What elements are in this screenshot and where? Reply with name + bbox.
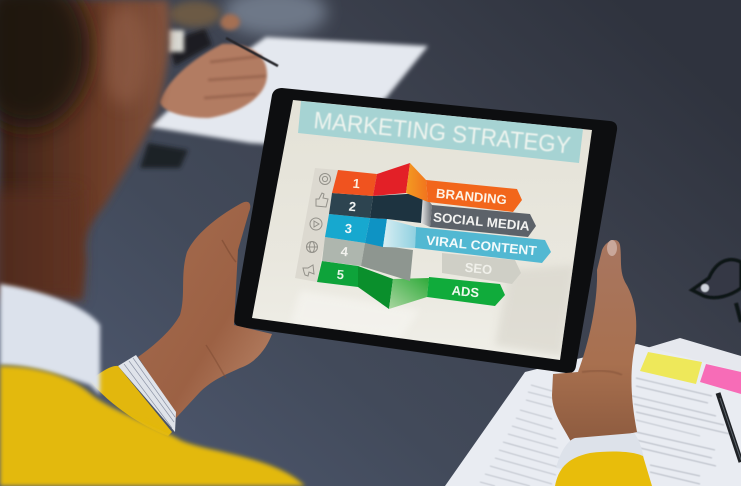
wrist and palm — [138, 202, 272, 418]
chart step 3: viral content: 3 — [344, 221, 353, 236]
hair — [0, 0, 90, 128]
ear glow — [101, 5, 149, 105]
shirt collar, blurred — [0, 284, 100, 395]
colleague's sleeve — [168, 28, 212, 66]
shirt cuff — [118, 355, 176, 432]
sweater sleeve — [90, 366, 172, 436]
tablet body — [234, 88, 617, 373]
icon: play — [310, 218, 322, 230]
knuckle shadow — [582, 371, 622, 375]
screen background patches — [290, 265, 575, 356]
title banner — [298, 101, 583, 163]
shirt cuff — [556, 433, 644, 470]
yellow sweater, blurred — [0, 366, 305, 486]
icon: megaphone — [303, 265, 314, 276]
colleague's finger — [220, 14, 240, 30]
chart step 3: viral content: VIRAL CONTENT — [425, 233, 537, 258]
front sheet — [445, 344, 741, 486]
chart step 5: ads — [317, 261, 505, 309]
chart step 1: branding: 1 — [352, 176, 361, 191]
icon: gear — [320, 174, 330, 184]
person's left hand holding tablet — [90, 202, 272, 436]
blurred papers and colleague's hand in the background — [140, 0, 428, 168]
yellow sticky note — [640, 352, 702, 384]
icon: thumbs up — [316, 193, 328, 207]
back sheet — [640, 338, 741, 486]
title: MARKETING STRATEGY — [312, 107, 572, 160]
white spot in background — [168, 30, 184, 52]
icon: globe — [306, 242, 318, 252]
person's head, blurred in foreground — [0, 0, 170, 300]
background paper — [150, 37, 428, 145]
icon column — [295, 168, 338, 282]
chart step 5: ads: 5 — [336, 267, 345, 282]
chart step 1: branding: BRANDING — [435, 186, 507, 207]
finger crease — [222, 240, 236, 262]
chart step 3: viral content — [325, 214, 551, 263]
paper text lines — [480, 378, 730, 486]
pink sticky note — [700, 364, 741, 394]
chart step 4: seo — [322, 237, 521, 284]
colleague's upper hand — [169, 1, 221, 27]
chart step 2: social media: 2 — [348, 199, 357, 214]
colleague's shoulder — [223, 0, 327, 36]
document papers on the right — [445, 338, 741, 486]
thumb, palm and wrist — [552, 240, 637, 446]
pen — [718, 393, 741, 462]
chart step 1: branding — [332, 163, 522, 212]
chart step 2: social media — [329, 193, 536, 237]
chart step 4: seo: SEO — [464, 260, 493, 277]
tablet — [234, 88, 617, 373]
phone on table — [140, 143, 188, 168]
person's right hand holding tablet — [552, 240, 652, 486]
neck shade — [0, 190, 80, 300]
colleague's pen — [226, 38, 278, 66]
chart step 2: social media: SOCIAL MEDIA — [432, 209, 531, 234]
sweater sleeve — [555, 452, 652, 486]
colleague's hand — [160, 44, 267, 118]
skin — [0, 0, 170, 300]
chart step 5: ads: ADS — [451, 283, 480, 300]
eyeglasses — [692, 260, 741, 322]
thumbnail — [607, 240, 617, 256]
tablet screen — [252, 100, 592, 360]
chart step 4: seo: 4 — [340, 244, 350, 259]
